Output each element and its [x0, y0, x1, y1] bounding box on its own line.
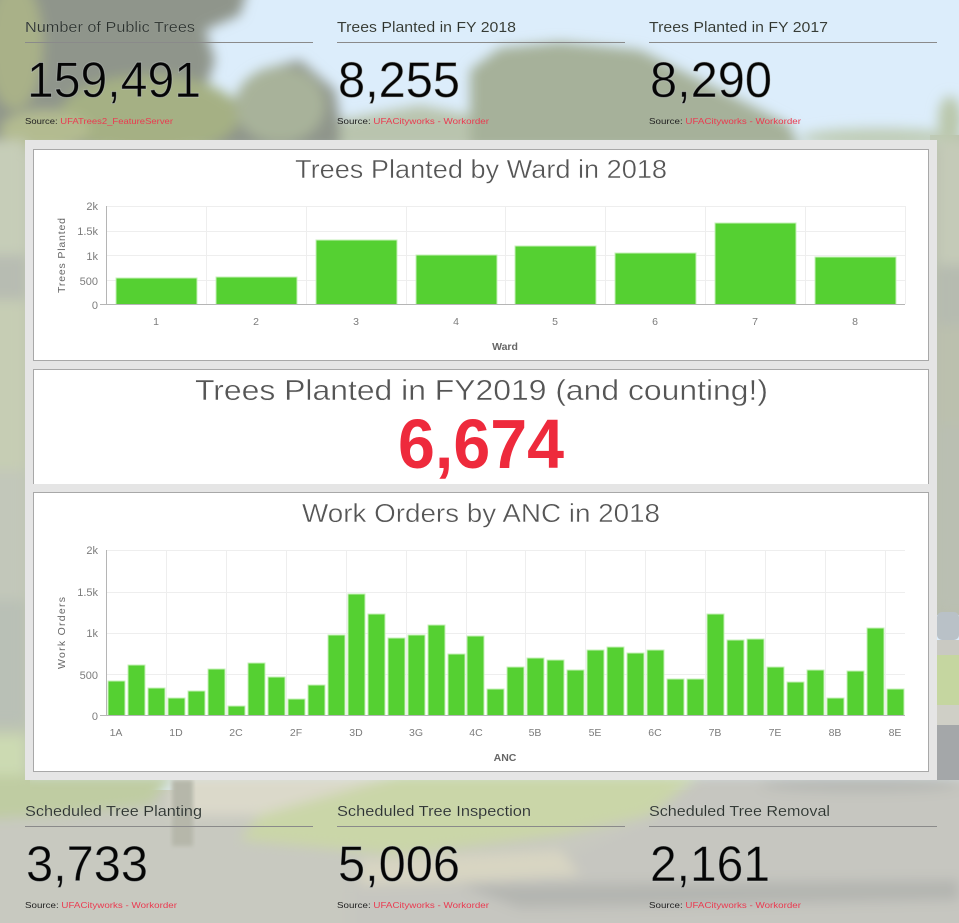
- bar chart: work orders by ANC: ANC: [494, 752, 517, 764]
- stat: Number of Public Trees: Number of Public Trees: [25, 19, 195, 36]
- bar chart: work orders by ANC: 1A: [110, 727, 122, 739]
- bar chart: trees planted by ward: 5: [552, 316, 558, 328]
- bar chart: work orders by ANC: 5B: [529, 727, 541, 739]
- stat: Scheduled Tree Inspection: Source: UFACityworks - Workorder: [337, 900, 489, 910]
- panel: Trees Planted by Ward chart: [34, 150, 928, 360]
- bar chart: work orders by ANC: 5E: [589, 727, 601, 739]
- bar chart: trees planted by ward: 8: [852, 316, 858, 328]
- stat: Scheduled Tree Removal: Source: UFACityworks - Workorder: [649, 900, 801, 910]
- stat: Scheduled Tree Inspection: Scheduled Tree Inspection: [337, 803, 531, 820]
- bar chart: trees planted by ward: 1.5k: [77, 226, 98, 238]
- bar chart: work orders by ANC: 8B: [829, 727, 841, 739]
- bar chart: trees planted by ward: Trees Planted: [56, 218, 68, 293]
- bar chart: work orders by ANC: 7E: [769, 727, 781, 739]
- heading: ward chart title: Trees Planted by Ward in 2018: [295, 154, 667, 184]
- stat: Scheduled Tree Planting: Scheduled Tree Planting: [25, 803, 202, 820]
- heading: ANC chart title: Work Orders by ANC in 2018: [302, 498, 660, 528]
- stat: Trees Planted in FY 2017: Source: UFACityworks - Workorder: [649, 116, 801, 126]
- bar chart: work orders by ANC: 0: [92, 711, 98, 723]
- bar chart: trees planted by ward: 1: [153, 316, 159, 328]
- bar chart: trees planted by ward: 2k: [86, 201, 98, 213]
- stat: Trees Planted in FY 2018: 8,255: [338, 52, 460, 108]
- bar chart: trees planted by ward: Ward: [492, 341, 518, 353]
- bar chart: trees planted by ward: 3: [353, 316, 359, 328]
- bar chart: work orders by ANC: 500: [80, 670, 98, 682]
- stat: Scheduled Tree Planting: [25, 803, 313, 910]
- bar chart: work orders by ANC: 1.5k: [77, 587, 98, 599]
- bar chart: work orders by ANC: 2k: [86, 545, 98, 557]
- bar chart: work orders by ANC: 3D: [349, 727, 363, 739]
- big number: 6,674: 6,674: [398, 405, 564, 483]
- bar chart: work orders by ANC: 1D: [169, 727, 183, 739]
- stat: Number of Public Trees: 159,491: [27, 52, 201, 108]
- bar chart: work orders by ANC: 6C: [648, 727, 662, 739]
- stat: Trees Planted in FY 2017: [649, 19, 937, 126]
- stat: Trees Planted in FY 2017: Trees Planted in FY 2017: [649, 19, 828, 36]
- stat: Number of Public Trees: Source: UFATrees2_FeatureServer: [25, 116, 173, 126]
- bar chart: trees planted by ward: 0: [92, 300, 98, 312]
- bar chart: work orders by ANC: 3G: [409, 727, 423, 739]
- bar chart: work orders by ANC: 2F: [290, 727, 302, 739]
- bar chart: work orders by ANC: 7B: [709, 727, 721, 739]
- bar chart: work orders by ANC: 1k: [86, 628, 98, 640]
- bar chart: trees planted by ward: 1k: [86, 251, 98, 263]
- bar chart: trees planted by ward: 2: [253, 316, 259, 328]
- stat: Scheduled Tree Removal: [649, 803, 937, 910]
- bar chart: trees planted by ward: 6: [652, 316, 658, 328]
- stat: Scheduled Tree Removal: 2,161: [650, 836, 770, 892]
- panel: Work Orders by ANC chart: [34, 492, 928, 772]
- stat: Scheduled Tree Inspection: 5,006: [338, 836, 460, 892]
- bar chart: trees planted by ward: 7: [752, 316, 758, 328]
- bar chart: work orders by ANC: 4C: [469, 727, 483, 739]
- bar chart: work orders by ANC: 2C: [229, 727, 243, 739]
- bar chart: work orders by ANC: 8E: [889, 727, 901, 739]
- stat: Scheduled Tree Inspection: [337, 803, 625, 910]
- stat: Trees Planted in FY 2018: [337, 19, 625, 126]
- panel: central grey container: [25, 140, 937, 780]
- bar chart: work orders by ANC: Work Orders: [56, 597, 68, 669]
- stat: Number of Public Trees: [25, 19, 313, 126]
- bar chart: trees planted by ward: 4: [453, 316, 459, 328]
- stat: Scheduled Tree Planting: 3,733: [26, 836, 148, 892]
- panel: FY2019 counter: [33, 369, 929, 484]
- bar chart: trees planted by ward: [56, 201, 906, 353]
- bar chart: work orders by ANC: [56, 545, 905, 764]
- stat: Trees Planted in FY 2018: Source: UFACityworks - Workorder: [337, 116, 489, 126]
- stat: Trees Planted in FY 2018: Trees Planted in FY 2018: [337, 19, 516, 36]
- heading: FY2019 title: Trees Planted in FY2019 (and counting!): [195, 375, 768, 407]
- stat: Scheduled Tree Removal: Scheduled Tree Removal: [649, 803, 830, 820]
- bar chart: trees planted by ward: 500: [80, 276, 98, 288]
- stat: Trees Planted in FY 2017: 8,290: [650, 52, 772, 108]
- stat: Scheduled Tree Planting: Source: UFACityworks - Workorder: [25, 900, 177, 910]
